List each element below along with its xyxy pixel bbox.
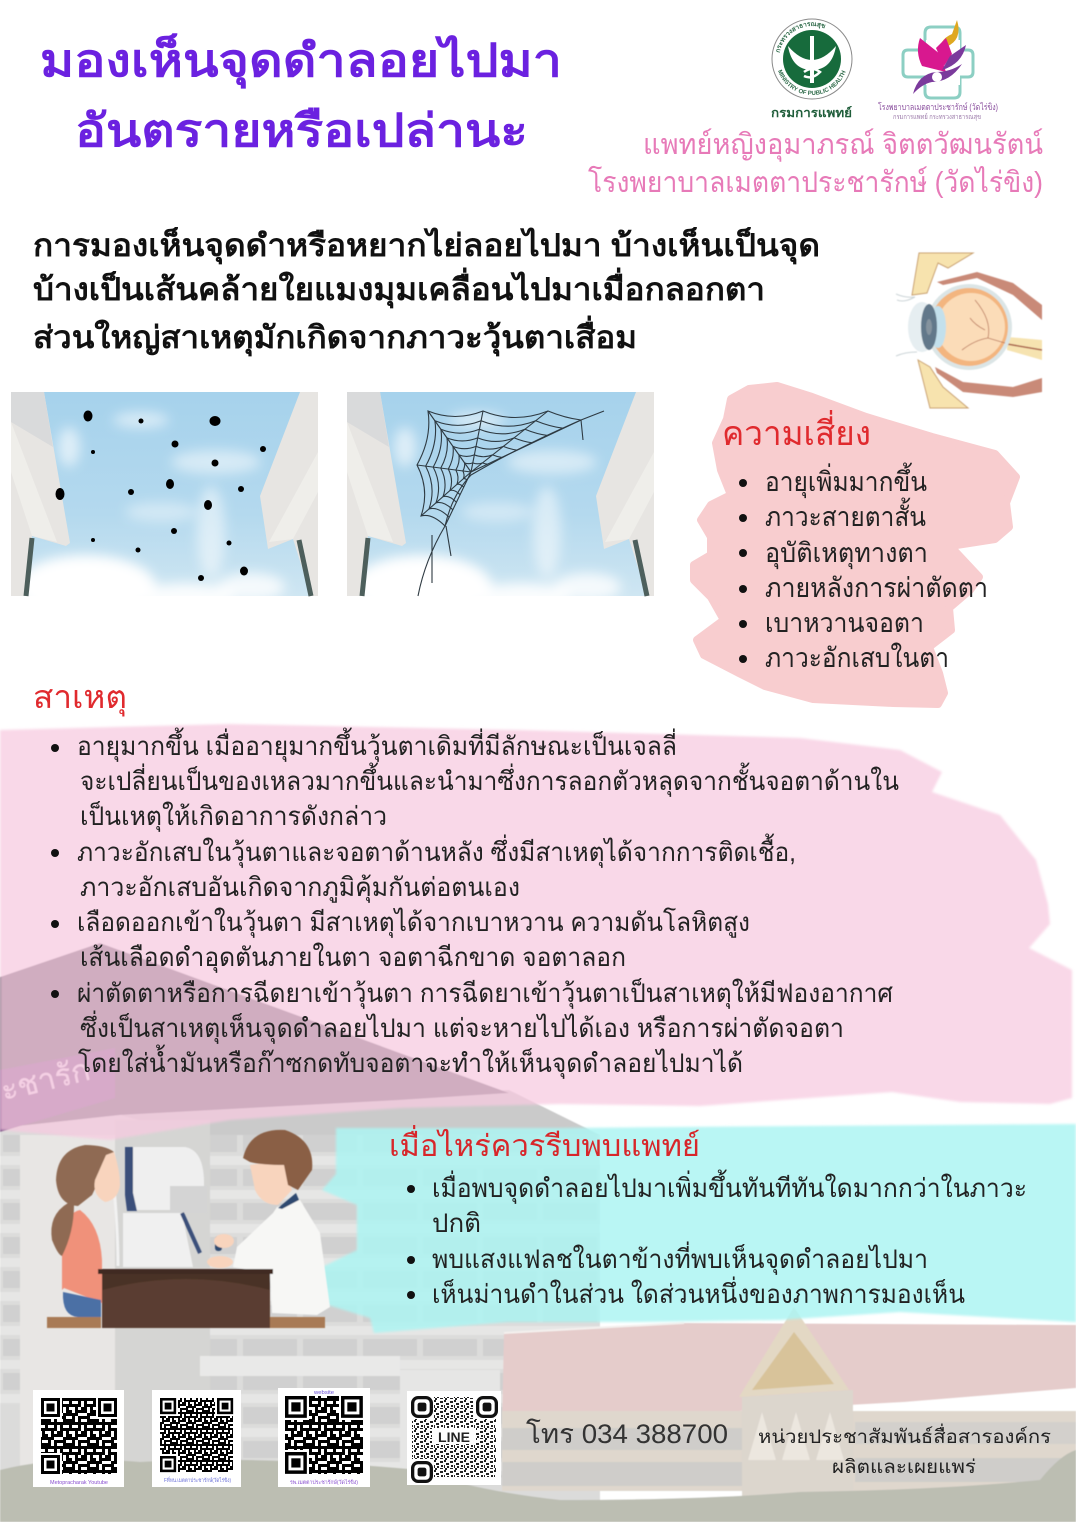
panel: risk factors text bbox=[722, 410, 988, 673]
causes list: จะเปลี่ยนเป็นของเหลวมากขึ้นและนำมาซึ่งการลอกตัวหลุดจากชั้นจอตาด้านใน bbox=[80, 762, 899, 797]
risk list: อายุเพิ่มมากขึ้น bbox=[765, 462, 927, 499]
QR code: LINE bbox=[407, 1391, 501, 1485]
doctor list: เห็นม่านดำในส่วน ใดส่วนหนึ่งของภาพการมองเห็น bbox=[432, 1276, 965, 1309]
background photo: hospital building: ะชารัก bbox=[0, 1052, 94, 1108]
intro text bbox=[33, 226, 820, 357]
logo: Ministry of Public Health: กรมการแพทย์ bbox=[771, 106, 852, 120]
heading: when to see a doctor: เมื่อไหร่ควรรีบพบแพทย์ bbox=[389, 1125, 700, 1163]
logo: Metta Pracharak Hospital bbox=[878, 20, 998, 121]
heading: risk: ความเสี่ยง bbox=[722, 410, 871, 453]
public relations credit bbox=[758, 1423, 1051, 1478]
panel: when to see a doctor text bbox=[389, 1125, 1027, 1309]
QR code: Facebook bbox=[152, 1390, 241, 1487]
risk list: ภายหลังการผ่าตัดตา bbox=[765, 573, 988, 603]
causes list: อายุมากขึ้น เมื่ออายุมากขึ้นวุ้นตาเดิมที่มีลักษณะเป็นเจลลี่ bbox=[77, 727, 677, 762]
image: black floaters bbox=[11, 392, 318, 619]
QR code: website: website bbox=[313, 1390, 334, 1396]
doctor list bbox=[407, 1169, 1027, 1309]
doctor list: ปกติ bbox=[432, 1208, 481, 1238]
title: อันตรายหรือเปล่านะ bbox=[75, 105, 528, 156]
intro text: ส่วนใหญ่สาเหตุมักเกิดจากภาวะวุ้นตาเสื่อม bbox=[33, 315, 637, 357]
logo: Ministry of Public Health: กระทรวงสาธารณสุข bbox=[776, 22, 826, 53]
causes list bbox=[51, 727, 899, 1079]
panel: when to see doctor brush background bbox=[302, 1124, 1076, 1333]
QR code: Youtube: Metopracharak Youtube bbox=[50, 1480, 108, 1486]
risk list: อุบัติเหตุทางตา bbox=[765, 538, 928, 570]
causes list: เส้นเลือดดำอุดตันภายในตา จอตาฉีกขาด จอตาลอก bbox=[80, 942, 626, 973]
risk list: ภาวะสายตาสั้น bbox=[765, 497, 926, 532]
QR code: website bbox=[278, 1388, 370, 1487]
logo: Ministry of Public Health: MINISTRY OF PUBLIC HEALTH bbox=[778, 70, 846, 95]
causes list: ซึ่งเป็นสาเหตุเห็นจุดดำลอยไปมา แต่จะหายไปได้เอง หรือการผ่าตัดจอตา bbox=[80, 1010, 844, 1044]
causes list: เป็นเหตุให้เกิดอาการดังกล่าว bbox=[80, 800, 387, 832]
causes list: เลือดออกเข้าในวุ้นตา มีสาเหตุได้จากเบาหวาน ความดันโลหิตสูง bbox=[77, 907, 750, 938]
public relations credit: หน่วยประชาสัมพันธ์สื่อสารองค์กร bbox=[758, 1423, 1051, 1448]
logo: Metta Pracharak Hospital: กรมการแพทย์ กระทรวงสาธารณสุข bbox=[893, 113, 981, 121]
logo: Ministry of Public Health bbox=[771, 18, 852, 120]
public relations credit: ผลิตและเผยแพร่ bbox=[832, 1457, 976, 1478]
causes list: ภาวะอักเสบในวุ้นตาและจอตาด้านหลัง ซึ่งมีสาเหตุได้จากการติดเชื้อ, bbox=[77, 833, 796, 868]
icon: eye anatomy bbox=[896, 253, 1042, 408]
risk list: เบาหวานจอตา bbox=[765, 608, 924, 638]
risk list: ภาวะอักเสบในตา bbox=[765, 642, 949, 673]
author and hospital name: โรงพยาบาลเมตตาประชารักษ์ (วัดไร่ขิง) bbox=[588, 165, 1043, 199]
logo: Metta Pracharak Hospital: โรงพยาบาลเมตตาประชารักษ์ (วัดไร่ขิง) bbox=[878, 101, 998, 112]
QR code: LINE: LINE bbox=[438, 1429, 470, 1445]
QR code: website: รพ.เมตตาประชารักษ์(วัดไร่ขิง) bbox=[290, 1479, 358, 1486]
doctor list: เมื่อพบจุดดำลอยไปมาเพิ่มขึ้นทันทีทันใดมากกว่าในภาวะ bbox=[432, 1169, 1027, 1204]
QR code: Youtube bbox=[33, 1390, 124, 1487]
heading: causes: สาเหตุ bbox=[33, 679, 127, 717]
causes list: ภาวะอักเสบอันเกิดจากภูมิคุ้มกันต่อตนเอง bbox=[80, 872, 520, 903]
title bbox=[40, 33, 562, 156]
intro text: บ้างเป็นเส้นคล้ายใยแมงมุมเคลื่อนไปมาเมื่อกลอกตา bbox=[33, 267, 765, 309]
QR code: Facebook: Fที่หน.เมตตาประชารักษ์(วัดไร่ขิง) bbox=[164, 1476, 231, 1484]
panel: causes text bbox=[33, 679, 899, 1079]
intro text: การมองเห็นจุดดำหรือหยากไย่ลอยไปมา บ้างเห็นเป็นจุด bbox=[33, 226, 820, 265]
causes list: ผ่าตัดตาหรือการฉีดยาเข้าวุ้นตา การฉีดยาเข้าวุ้นตาเป็นสาเหตุให้มีฟองอากาศ bbox=[77, 977, 893, 1009]
doctor list: พบแสงแฟลชในตาข้างที่พบเห็นจุดดำลอยไปมา bbox=[432, 1241, 928, 1275]
image: cobweb floater bbox=[347, 392, 654, 619]
phone number: โทร 034 388700 bbox=[526, 1419, 728, 1449]
illustration: patient and doctor at eye exam bbox=[47, 1130, 330, 1328]
panel: causes brush background bbox=[0, 724, 1072, 1140]
causes list: โดยใส่น้ำมันหรือก๊าซกดทับจอตาจะทำให้เห็นจุดดำลอยไปมาได้ bbox=[78, 1044, 743, 1079]
risk list bbox=[739, 462, 988, 673]
author and hospital name bbox=[588, 128, 1043, 199]
title: มองเห็นจุดดำลอยไปมา bbox=[40, 33, 562, 89]
background photo: hospital building bbox=[0, 920, 1076, 1522]
panel: risk brush background bbox=[694, 386, 1016, 704]
author and hospital name: แพทย์หญิงอุมาภรณ์ จิตตวัฒนรัตน์ bbox=[643, 128, 1043, 162]
